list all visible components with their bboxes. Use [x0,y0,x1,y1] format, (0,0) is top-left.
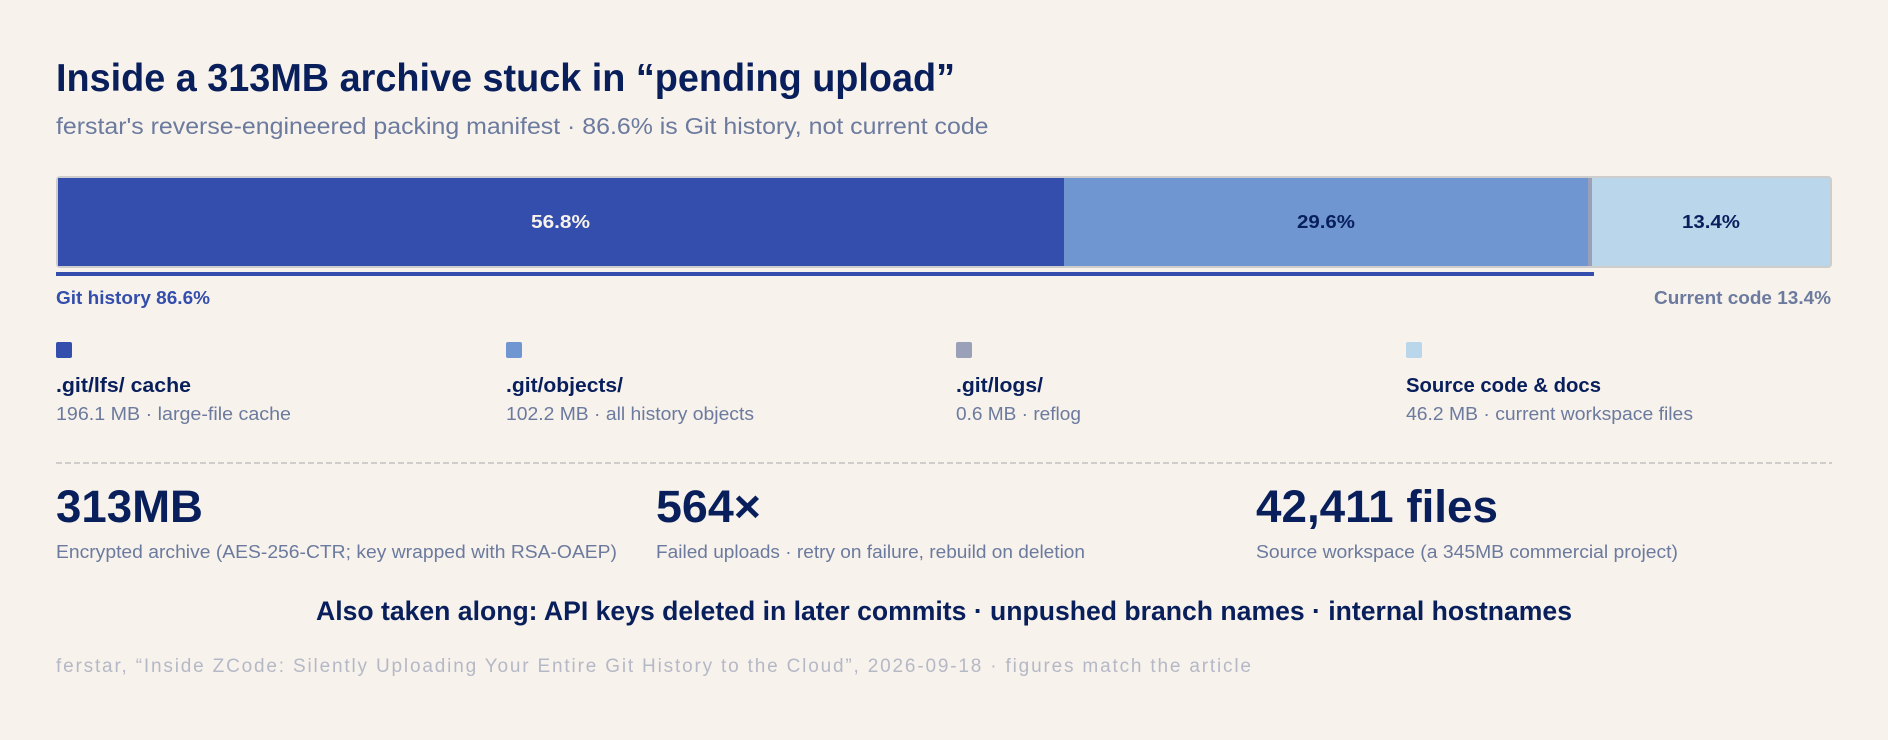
description: Failed uploads · retry on failure, rebuild on deletion [656,541,1085,562]
git history label: Git history 86.6% [56,287,210,308]
stat: failed uploads [656,481,1085,562]
legend item: .git/objects/ [506,342,754,424]
git history bracket line [56,272,1594,276]
subtitle: ferstar's reverse-engineered packing manifest · 86.6% is Git history, not current code [56,113,989,139]
legend item: .git/lfs/ cache [56,342,291,424]
stat: workspace files [1256,481,1678,562]
detail: 0.6 MB · reflog [956,403,1081,424]
value: 42,411 files [1256,481,1498,532]
title: Inside a 313MB archive stuck in “pending upload” [56,57,955,100]
swatch [56,342,72,358]
name: .git/lfs/ cache [56,374,191,397]
description: Encrypted archive (AES-256-CTR; key wrapped with RSA-OAEP) [56,541,617,562]
source footer: ferstar, “Inside ZCode: Silently Uploading Your Entire Git History to the Cloud”, 2026-09-18 · figures match the article [56,656,1251,677]
value: 313MB [56,481,203,532]
callout: Also taken along: API keys deleted in later commits · unpushed branch names · internal hostnames [316,596,1572,626]
segment: .git/objects/ [1064,178,1588,266]
swatch [506,342,522,358]
detail: 196.1 MB · large-file cache [56,403,291,424]
detail: 102.2 MB · all history objects [506,403,754,424]
stacked bar chart [57,177,1831,267]
swatch [956,342,972,358]
name: Source code & docs [1406,374,1601,397]
segment: .git/logs/ [1588,178,1592,266]
segment: .git/lfs/ cache [58,178,1064,266]
legend item: source code and docs [1406,342,1693,424]
name: .git/objects/ [506,374,623,397]
legend item: .git/logs/ [956,342,1081,424]
segment: source code and docs [1592,178,1829,266]
current code label: Current code 13.4% [1654,287,1831,308]
detail: 46.2 MB · current workspace files [1406,403,1693,424]
description: Source workspace (a 345MB commercial project) [1256,541,1678,562]
segment: source code and docs: 13.4% [1682,211,1740,232]
swatch [1406,342,1422,358]
value: 564× [656,481,761,532]
stat: archive size [56,481,617,562]
bar frame [57,177,1831,267]
segment: .git/objects/: 29.6% [1297,211,1355,232]
name: .git/logs/ [956,374,1043,397]
segment: .git/lfs/ cache: 56.8% [531,211,590,232]
